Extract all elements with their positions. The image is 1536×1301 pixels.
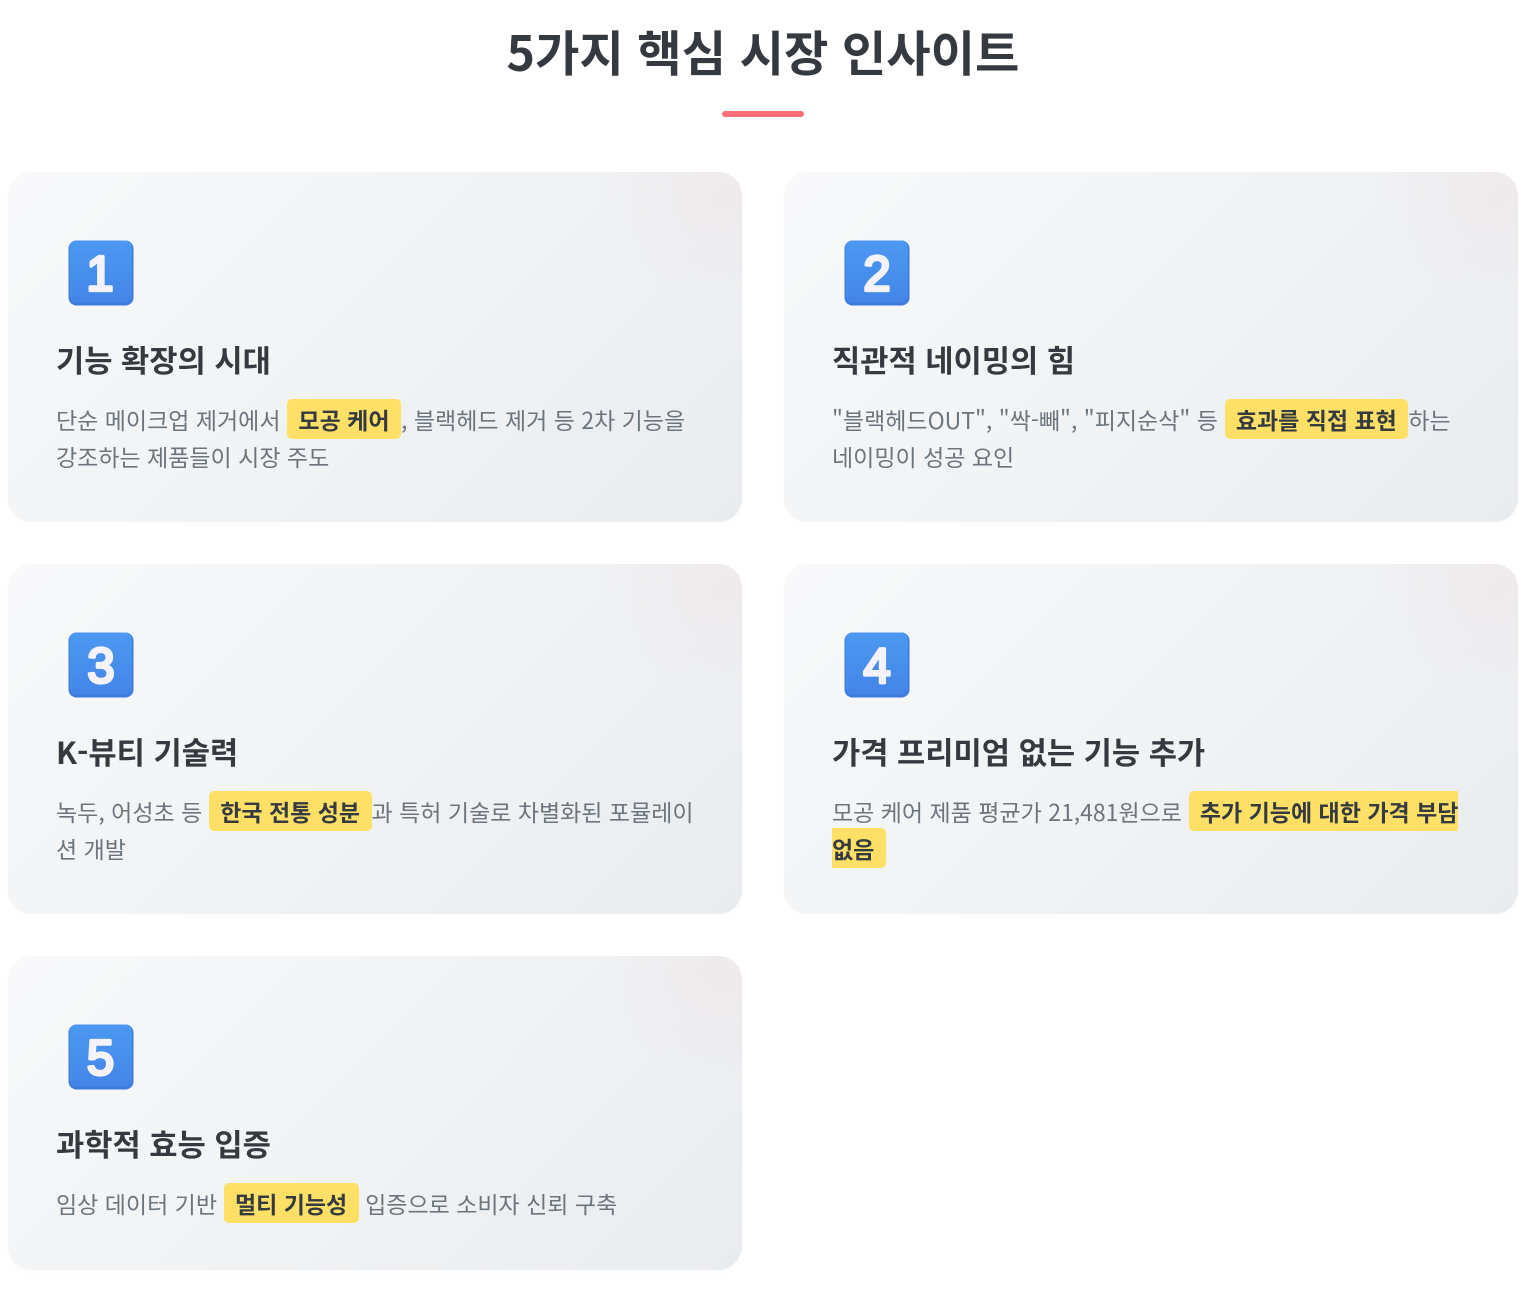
heading: 과학적 효능 입증 <box>56 1120 271 1164</box>
icon: number 4: 4 <box>863 640 891 694</box>
icon: number 2: 2 <box>863 248 891 302</box>
heading: 직관적 네이밍의 힘 <box>832 336 1075 380</box>
panel: insight 1 <box>8 172 742 522</box>
heading: 가격 프리미엄 없는 기능 추가 <box>832 728 1205 772</box>
panel: insight 2 <box>784 172 1518 522</box>
text block: 단순 메이크업 제거에서 모공 케어 , 블랙헤드 제거 등 2차 기능을 강조하는 제품들이 시장 주도 <box>56 402 685 473</box>
panel: insight 5 <box>8 956 742 1270</box>
text block: 모공 케어 제품 평균가 21,481원으로 추가 기능에 대한 가격 부담 없음 <box>832 794 1458 865</box>
text block: "블랙헤드OUT", "싹-빼", "피지순삭" 등 효과를 직접 표현 하는 네이밍이 성공 요인 <box>832 402 1451 473</box>
icon: number 5 <box>68 1024 134 1090</box>
heading: 기능 확장의 시대 <box>56 336 271 380</box>
heading: K-뷰티 기술력 <box>56 728 238 772</box>
icon: number 3 <box>68 632 134 698</box>
icon: number 1: 1 <box>86 248 114 302</box>
text block: 녹두, 어성초 등 한국 전통 성분 과 특허 기술로 차별화된 포뮬레이션 개발 <box>56 794 694 865</box>
title: 5가지 핵심 시장 인사이트 <box>507 15 1019 85</box>
panel: insight 3 <box>8 564 742 914</box>
text block: 임상 데이터 기반 멀티 기능성 입증으로 소비자 신뢰 구축 <box>56 1186 617 1220</box>
icon: number 4 <box>844 632 910 698</box>
title accent rule <box>722 111 804 117</box>
icon: number 5: 5 <box>87 1032 114 1086</box>
panel: insight 4 <box>784 564 1518 914</box>
icon: number 3: 3 <box>87 640 115 694</box>
icon: number 2 <box>844 240 910 306</box>
icon: number 1 <box>68 240 134 306</box>
